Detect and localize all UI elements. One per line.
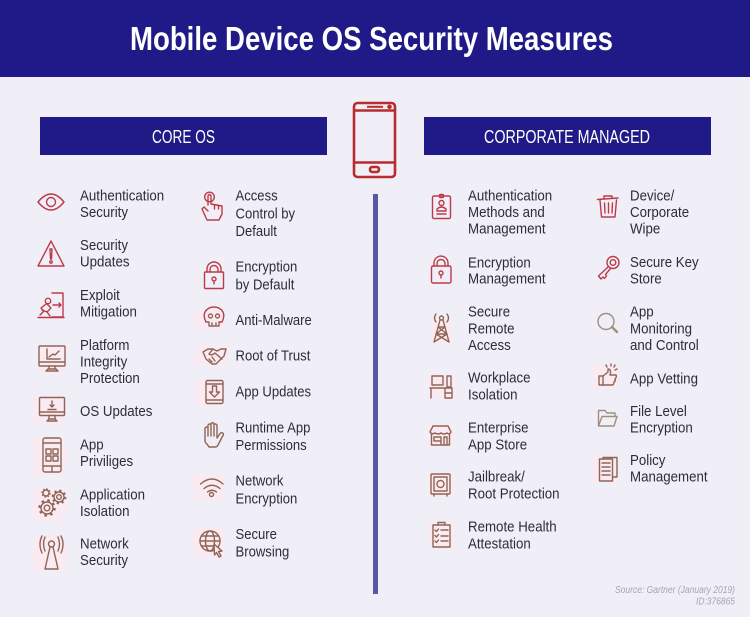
heading: corporate managed: CORPORATE MANAGED bbox=[484, 127, 650, 147]
item: encryption by default: Encryption bbox=[236, 258, 297, 275]
item: workplace isolation bbox=[429, 369, 531, 402]
item: network security: Network bbox=[80, 535, 130, 552]
heading: core os bbox=[40, 117, 327, 155]
item: enterprise app store: Enterprise bbox=[468, 419, 529, 436]
icon: skull bbox=[204, 307, 224, 326]
icon: monitor with download bbox=[40, 398, 64, 421]
item: jailbreak root protection: Jailbreak/ bbox=[468, 468, 525, 485]
icon: smartphone bbox=[354, 103, 395, 177]
item: encryption by default: by Default bbox=[236, 276, 294, 292]
icon: wifi bbox=[200, 479, 223, 496]
item: secure remote access: Remote bbox=[468, 320, 515, 336]
item: runtime app permissions: Runtime App bbox=[236, 419, 311, 435]
item: app monitoring and control: and Control bbox=[630, 336, 699, 353]
icon: padlock bbox=[204, 262, 224, 288]
item: network encryption: Encryption bbox=[236, 490, 297, 506]
item: secure browsing: Secure bbox=[236, 525, 277, 542]
item: jailbreak root protection: Root Protection bbox=[468, 485, 560, 501]
item: jailbreak root protection bbox=[428, 468, 560, 501]
item: encryption management: Management bbox=[468, 270, 546, 287]
item: secure remote access bbox=[432, 303, 515, 353]
icon: antenna tower bbox=[40, 536, 63, 569]
icon: eye bbox=[38, 194, 64, 210]
item: device corporate wipe bbox=[598, 187, 689, 237]
icon: document stack bbox=[600, 458, 617, 481]
item: platform integrity protection: Integrity bbox=[80, 353, 127, 370]
item: encryption management bbox=[432, 254, 546, 287]
item: file level encryption: Encryption bbox=[630, 419, 693, 436]
item: workplace isolation: Isolation bbox=[468, 386, 517, 402]
item: platform integrity protection bbox=[38, 336, 140, 386]
icon: gears bbox=[40, 489, 65, 516]
item: secure browsing: Browsing bbox=[236, 543, 289, 560]
item: authentication methods and management: Management bbox=[468, 220, 546, 237]
item: os updates bbox=[33, 396, 152, 424]
item: platform integrity protection: Platform bbox=[80, 336, 129, 353]
icon: padlock bbox=[432, 256, 451, 283]
item: security updates bbox=[38, 236, 129, 270]
icon: phone with apps bbox=[43, 438, 61, 472]
item: access control by default: Default bbox=[236, 222, 277, 239]
item: app priviliges: Priviliges bbox=[80, 452, 133, 469]
item: app priviliges bbox=[33, 436, 133, 474]
item: app monitoring and control: Monitoring bbox=[630, 320, 692, 336]
item: workplace isolation: Workplace bbox=[468, 369, 531, 386]
icon: magnifying glass bbox=[598, 314, 617, 332]
item: authentication security: Authentication bbox=[80, 187, 164, 204]
item: runtime app permissions bbox=[205, 419, 311, 453]
item: exploit mitigation bbox=[38, 286, 137, 320]
icon: clipboard checklist bbox=[433, 522, 450, 547]
icon: open folder bbox=[598, 410, 617, 426]
item: security updates: Updates bbox=[80, 253, 129, 270]
item: secure remote access: Secure bbox=[468, 303, 510, 320]
icon: radio tower bbox=[434, 314, 449, 342]
item: device corporate wipe: Wipe bbox=[630, 220, 660, 237]
icon: trash can bbox=[598, 196, 618, 217]
title banner: Mobile Device OS Security Measures bbox=[130, 20, 613, 57]
icon: raised hand bbox=[205, 423, 224, 447]
item: device corporate wipe: Corporate bbox=[630, 204, 689, 220]
item: file level encryption bbox=[598, 402, 693, 436]
item: secure remote access: Access bbox=[468, 336, 511, 353]
item: access control by default: Access bbox=[236, 187, 278, 204]
item: application isolation: Application bbox=[80, 486, 145, 502]
item: policy management bbox=[592, 451, 708, 485]
item: network encryption bbox=[193, 472, 297, 506]
item: anti-malware: Anti-Malware bbox=[236, 311, 312, 328]
item: secure browsing bbox=[193, 525, 289, 560]
icon: phone with down arrow bbox=[206, 380, 223, 404]
item: app monitoring and control: App bbox=[630, 303, 654, 320]
title banner bbox=[0, 0, 750, 77]
item: policy management: Policy bbox=[630, 451, 665, 468]
item: policy management: Management bbox=[630, 468, 708, 485]
icon: warning triangle bbox=[38, 241, 64, 266]
item: application isolation bbox=[33, 486, 145, 520]
source note: ID:376865 bbox=[696, 596, 735, 608]
item: secure key store: Secure Key bbox=[630, 253, 699, 270]
icon: handshake bbox=[203, 349, 226, 364]
item: authentication methods and management: Methods and bbox=[468, 204, 545, 220]
item: os updates: OS Updates bbox=[80, 402, 152, 419]
item: root of trust: Root of Trust bbox=[236, 347, 310, 364]
item: secure key store bbox=[598, 253, 699, 287]
item: app priviliges: App bbox=[80, 436, 104, 453]
item: authentication security bbox=[38, 187, 164, 220]
item: device corporate wipe: Device/ bbox=[630, 187, 674, 204]
item: secure key store: Store bbox=[630, 270, 662, 287]
heading: corporate managed bbox=[424, 117, 711, 155]
item: security updates: Security bbox=[80, 236, 128, 253]
item: access control by default bbox=[202, 187, 295, 239]
item: network security: Security bbox=[80, 551, 128, 568]
item: access control by default: Control by bbox=[236, 205, 295, 222]
source note bbox=[615, 585, 735, 608]
item: enterprise app store bbox=[428, 419, 529, 452]
item: remote health attestation bbox=[428, 518, 557, 551]
icon: monitor with chart bbox=[39, 346, 65, 371]
item: exploit mitigation: Mitigation bbox=[80, 303, 137, 320]
item: app updates bbox=[194, 380, 311, 405]
icon: safe bbox=[431, 474, 450, 496]
icon: desk with computer bbox=[430, 376, 452, 398]
item: encryption management: Encryption bbox=[468, 254, 531, 270]
item: runtime app permissions: Permissions bbox=[236, 436, 307, 453]
icon: pointing hand bbox=[202, 192, 222, 220]
center divider bbox=[373, 194, 378, 594]
item: app vetting bbox=[592, 364, 698, 387]
item: remote health attestation: Remote Health bbox=[468, 518, 557, 535]
item: file level encryption: File Level bbox=[630, 402, 687, 419]
item: app vetting: App Vetting bbox=[630, 370, 698, 386]
item: app updates: App Updates bbox=[236, 383, 311, 400]
item: anti-malware bbox=[194, 307, 312, 328]
item: network encryption: Network bbox=[236, 472, 283, 489]
item: encryption by default bbox=[204, 258, 297, 292]
icon: key bbox=[598, 256, 619, 279]
item: network security bbox=[33, 535, 130, 571]
item: authentication security: Security bbox=[80, 203, 128, 220]
item: platform integrity protection: Protection bbox=[80, 369, 140, 386]
icon: person running through door bbox=[38, 293, 64, 318]
item: enterprise app store: App Store bbox=[468, 436, 527, 452]
icon: storefront bbox=[430, 426, 451, 445]
item: remote health attestation: Attestation bbox=[468, 535, 531, 551]
item: authentication methods and management bbox=[432, 187, 552, 237]
item: exploit mitigation: Exploit bbox=[80, 286, 120, 303]
item: authentication methods and management: Authentication bbox=[468, 187, 552, 204]
heading: core os: CORE OS bbox=[152, 127, 215, 147]
icon: globe with cursor bbox=[200, 531, 222, 557]
item: app monitoring and control bbox=[598, 303, 699, 353]
icon: thumbs up bbox=[599, 364, 617, 385]
icon: id badge bbox=[432, 194, 450, 218]
item: application isolation: Isolation bbox=[80, 502, 129, 519]
item: root of trust bbox=[194, 345, 310, 365]
